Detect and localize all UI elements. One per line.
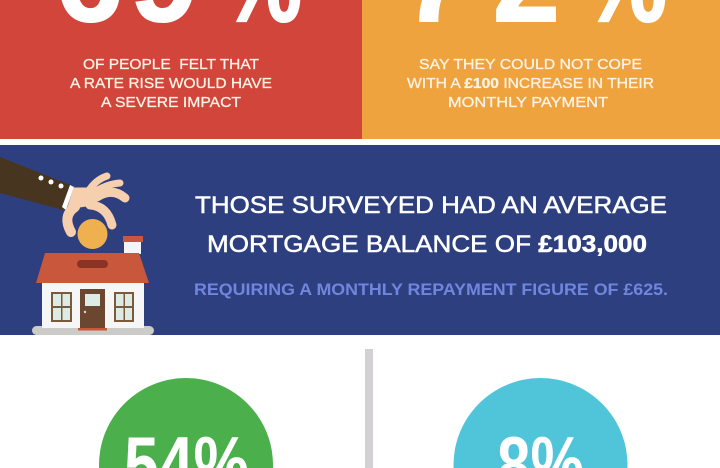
sleeve — [0, 157, 74, 210]
text block: monthly repayment: REQUIRING A MONTHLY REPAYMENT FIGURE OF £625. — [194, 281, 668, 299]
text block: cannot cope caption — [407, 56, 654, 111]
house walls — [42, 283, 144, 328]
big number: 69% — [56, 0, 302, 47]
text block: cannot cope caption: WITH A £100 INCREASE IN THEIR — [407, 75, 654, 92]
heading: average mortgage balance — [195, 192, 667, 258]
stat circle: 54% — [99, 378, 273, 468]
big number: 72% — [403, 0, 667, 47]
house base — [32, 326, 154, 335]
vertical divider — [365, 349, 373, 468]
icon: hand dropping coin into house — [0, 157, 154, 335]
right window — [114, 292, 134, 322]
text block: severe impact caption: A RATE RISE WOULD HAVE — [70, 75, 272, 92]
panel: red statistic — [0, 0, 362, 139]
stat circle: 8% — [454, 378, 627, 468]
chimney — [123, 236, 143, 254]
left window — [51, 292, 72, 322]
hand — [67, 176, 125, 232]
heading: average mortgage balance: THOSE SURVEYED HAD AN AVERAGE — [195, 192, 667, 219]
text block: cannot cope caption: SAY THEY COULD NOT COPE — [419, 56, 642, 73]
door — [78, 289, 107, 330]
text block: severe impact caption — [70, 56, 272, 111]
text block: severe impact caption: A SEVERE IMPACT — [101, 94, 241, 111]
panel: navy mortgage balance — [0, 145, 720, 335]
coin — [78, 219, 108, 249]
roof — [36, 253, 149, 283]
coin slot — [77, 260, 108, 268]
text block: cannot cope caption: MONTHLY PAYMENT — [448, 94, 608, 111]
heading: average mortgage balance: MORTGAGE BALANCE OF £103,000 — [207, 231, 647, 258]
text block: severe impact caption: OF PEOPLE FELT THAT — [83, 56, 259, 73]
panel: orange statistic — [362, 0, 720, 139]
